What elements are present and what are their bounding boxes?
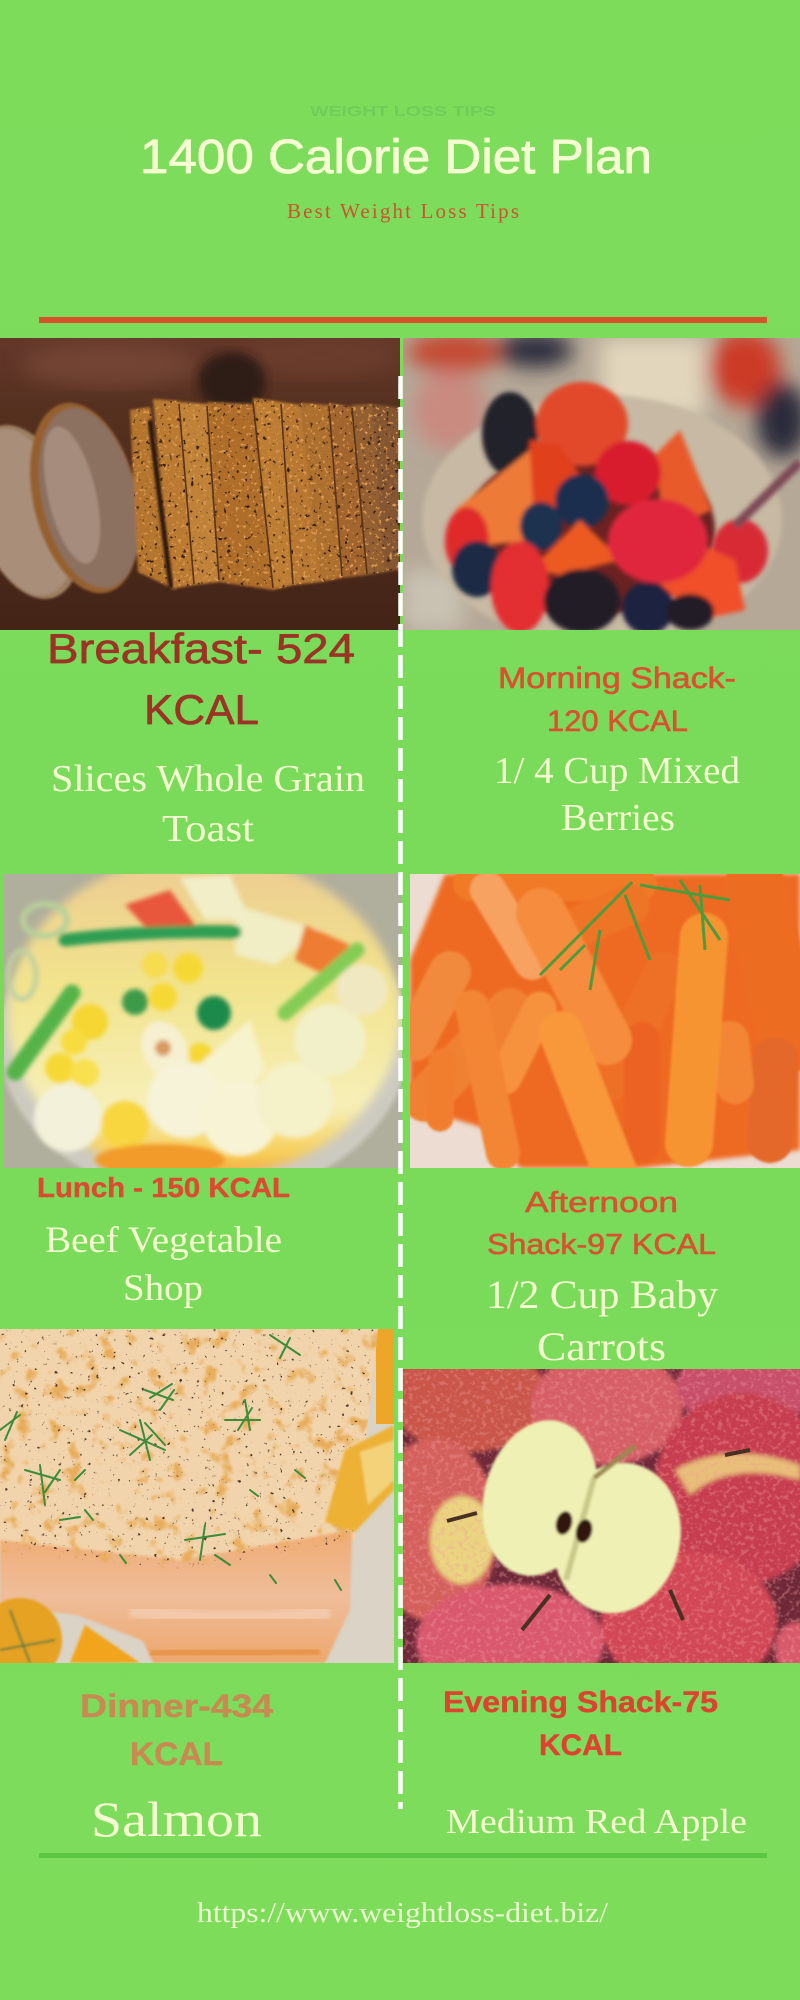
divider: green rule	[39, 1853, 767, 1858]
text: afternoon snack food: 1/2 Cup Baby	[486, 1272, 718, 1317]
heading: lunch: Lunch - 150 KCAL	[37, 1172, 290, 1203]
text: morning snack food	[494, 750, 740, 839]
heading: breakfast	[47, 625, 355, 733]
heading: afternoon snack: Shack-97 KCAL	[487, 1229, 716, 1261]
heading: evening snack: Evening Shack-75	[443, 1686, 718, 1719]
panel: evening snack	[403, 1369, 800, 1840]
heading: evening snack	[443, 1686, 718, 1762]
divider: red rule	[39, 317, 767, 323]
heading: breakfast: KCAL	[144, 686, 259, 733]
panel: afternoon snack	[410, 874, 800, 1369]
text: lunch food: Beef Vegetable	[45, 1220, 282, 1261]
footer url: https://www.weightloss-diet.biz/	[197, 1898, 608, 1929]
heading: morning snack: Morning Shack-	[498, 662, 736, 695]
icon: herb flecks	[0, 1335, 341, 1590]
panel: breakfast	[0, 338, 400, 850]
heading: dinner: KCAL	[130, 1736, 223, 1772]
photo: vegetable soup	[4, 874, 402, 1168]
photo: red apples	[403, 1369, 800, 1663]
text: dinner food: Salmon	[91, 1791, 262, 1847]
photo: mixed berries	[403, 338, 800, 630]
text: lunch food: Shop	[123, 1268, 203, 1309]
photo: sliced whole grain bread	[0, 338, 400, 630]
title: 1400 Calorie Diet Plan	[140, 131, 652, 184]
divider: dashed centre line	[398, 376, 403, 1809]
photo: baked salmon	[0, 1329, 394, 1663]
heading: morning snack	[498, 662, 736, 738]
panel: morning snack	[403, 330, 800, 839]
text: breakfast food: Slices Whole Grain	[51, 758, 365, 800]
text: morning snack food: 1/ 4 Cup Mixed	[494, 750, 740, 792]
heading: dinner: Dinner-434	[80, 1688, 273, 1724]
heading: breakfast: Breakfast- 524	[47, 625, 355, 672]
heading: dinner	[80, 1688, 273, 1772]
heading: evening snack: KCAL	[539, 1729, 622, 1762]
text: evening snack food: Medium Red Apple	[446, 1802, 747, 1841]
text: afternoon snack food	[486, 1272, 718, 1369]
text: morning snack food: Berries	[561, 797, 675, 839]
header	[140, 103, 652, 223]
panel: lunch	[0, 854, 409, 1309]
text: breakfast food: Toast	[162, 808, 254, 850]
text: lunch food	[45, 1220, 282, 1309]
heading: afternoon snack	[487, 1187, 716, 1261]
heading: morning snack: 120 KCAL	[547, 705, 688, 738]
text: afternoon snack food: Carrots	[537, 1324, 666, 1369]
eyebrow label: WEIGHT LOSS TIPS	[310, 103, 496, 120]
panel: dinner	[0, 1329, 394, 1847]
photo: baby carrots	[410, 874, 800, 1168]
heading: afternoon snack: Afternoon	[525, 1187, 678, 1219]
text: breakfast food	[51, 758, 365, 850]
subtitle: Best Weight Loss Tips	[287, 199, 519, 223]
